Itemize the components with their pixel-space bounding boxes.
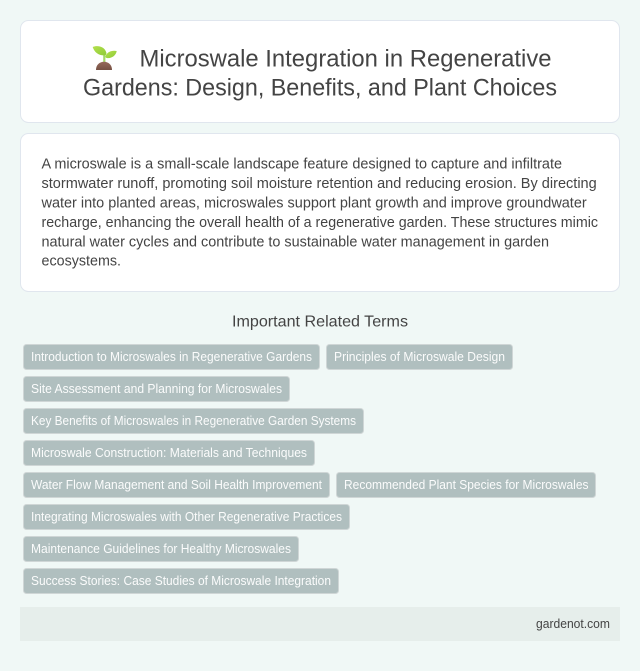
text block: description paragraph: A microswale is a small-scale landscape feature designed to capture and infiltrate — [42, 156, 562, 172]
tag: introduction — [24, 344, 320, 370]
tag: key benefits — [24, 408, 364, 434]
heading: title: Microswale Integration in Regenerative — [140, 46, 552, 73]
tag: success stories: Success Stories: Case Studies of Microswale Integration — [31, 574, 331, 588]
tag: maintenance — [24, 536, 298, 562]
tag: construction: Microswale Construction: Materials and Techniques — [31, 446, 307, 460]
text block: description paragraph: recharge, enhancing the overall health of a regenerative garden. These structures mimic — [42, 215, 598, 231]
tag: water flow: Water Flow Management and Soil Health Improvement — [31, 478, 322, 492]
text block: description paragraph: stormwater runoff, promoting soil moisture retention and reducing erosion. By directing — [42, 176, 597, 192]
icon: sprout — [93, 46, 117, 70]
tag: construction — [24, 440, 314, 466]
tag: integrating — [24, 504, 350, 530]
tag: success stories — [24, 568, 338, 594]
panel: title card — [20, 20, 620, 122]
panel: related term tags — [24, 344, 596, 594]
text block: description paragraph: water into planted areas, microswales support plant growth and improve groundwater — [41, 195, 587, 211]
tag: maintenance: Maintenance Guidelines for Healthy Microswales — [31, 542, 291, 556]
tag: principles — [326, 344, 512, 370]
text block: description paragraph: natural water cycles and contribute to sustainable water management in garden — [42, 234, 549, 250]
tag: introduction: Introduction to Microswales in Regenerative Gardens — [31, 350, 312, 364]
tag: water flow — [24, 472, 330, 498]
tag: site assessment — [24, 376, 290, 402]
tag: integrating: Integrating Microswales with Other Regenerative Practices — [31, 510, 342, 524]
tag: principles: Principles of Microswale Design — [334, 350, 505, 364]
footer — [20, 607, 620, 641]
heading: title: Gardens: Design, Benefits, and Plant Choices — [83, 74, 557, 102]
text block: description paragraph: ecosystems. — [42, 253, 121, 269]
heading: important related terms: Important Related Terms — [232, 314, 408, 331]
tag: site assessment: Site Assessment and Planning for Microswales — [31, 382, 282, 396]
tag: recommended plants: Recommended Plant Species for Microswales — [344, 478, 588, 492]
panel: description — [20, 134, 620, 292]
tag: key benefits: Key Benefits of Microswales in Regenerative Garden Systems — [31, 414, 356, 428]
tag: recommended plants — [336, 472, 596, 498]
heading: title — [83, 46, 557, 102]
text block: description paragraph — [41, 156, 598, 269]
text: site name: gardenot.com — [536, 616, 610, 631]
